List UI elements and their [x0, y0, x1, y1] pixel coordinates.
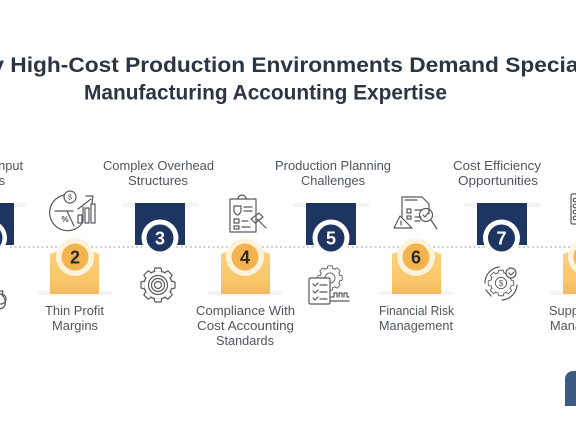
step 3: complex overhead structures: Structures: [128, 173, 188, 188]
step 6: financial risk management: [379, 197, 455, 333]
step 7: cost efficiency opportunities: 7: [496, 228, 507, 248]
step 4: compliance with cost accounting standards: [196, 195, 295, 348]
step 4: compliance with cost accounting standards: Cost Accounting: [197, 318, 294, 333]
title: Manufacturing Accounting Expertise: [84, 80, 447, 104]
icon: checklist, gear and factory: [309, 266, 349, 304]
icon: dollar gear cycle: [485, 267, 517, 300]
step 6: financial risk management: Management: [379, 318, 453, 333]
step 5: production planning challenges: 5: [326, 228, 336, 248]
step 4: compliance with cost accounting standards: 4: [240, 248, 250, 268]
step 6: financial risk management: 6: [411, 248, 421, 268]
step 5: production planning challenges: Challenges: [301, 173, 365, 188]
step 2: thin profit margins: 2: [70, 248, 80, 268]
icon: money bag: [0, 291, 6, 309]
step 3: complex overhead structures: [103, 158, 214, 302]
step 2: thin profit margins: Margins: [52, 318, 98, 333]
icon: profit chart: [50, 191, 95, 231]
step 6: financial risk management: Financial Risk: [379, 303, 455, 318]
step 7: cost efficiency opportunities: Opportunities: [458, 173, 538, 188]
step 5: production planning challenges: Production Planning: [275, 158, 391, 173]
step 2: thin profit margins: [38, 191, 112, 333]
icon: clipboard and gavel: [230, 195, 266, 232]
step 4: compliance with cost accounting standards: Compliance With: [196, 303, 295, 318]
step 4: compliance with cost accounting standards: Standards: [216, 333, 274, 348]
step 7: cost efficiency opportunities: [453, 158, 542, 300]
step 8: supply chain management: [549, 194, 576, 333]
icon: list board: [571, 194, 576, 224]
corner tab: [565, 371, 576, 406]
dotted timeline: [10, 246, 576, 248]
step 7: cost efficiency opportunities: Cost Efficiency: [453, 158, 542, 173]
step 3: complex overhead structures: 3: [155, 228, 165, 248]
step 2: thin profit margins: Thin Profit: [45, 303, 104, 318]
step 2: thin profit margins: %: [61, 215, 69, 224]
step 1: input costs: [0, 158, 26, 309]
step 5: production planning challenges: [275, 158, 391, 304]
step 2: thin profit margins: $: [68, 194, 72, 202]
icon: risk document: [394, 197, 437, 229]
icon: gear: [141, 268, 175, 302]
step 3: complex overhead structures: Complex Overhead: [103, 158, 214, 173]
title: [0, 53, 576, 104]
step 7: cost efficiency opportunities: $: [499, 279, 504, 288]
